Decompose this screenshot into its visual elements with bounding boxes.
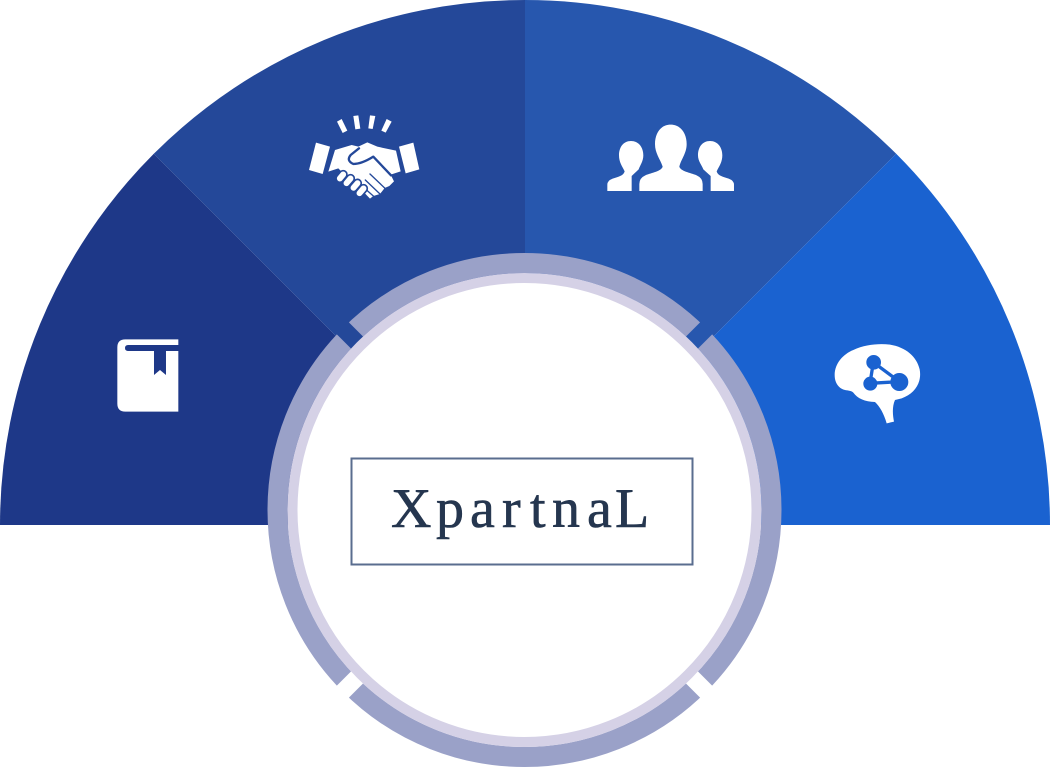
icon: handshake xyxy=(309,115,419,199)
logo box xyxy=(352,458,692,564)
sector: upper right xyxy=(525,0,896,525)
cuffs xyxy=(309,143,419,174)
rays xyxy=(337,115,392,133)
clasped hands xyxy=(328,142,401,199)
sector: far left xyxy=(0,154,525,525)
panel: four semicircle sectors xyxy=(0,0,1050,525)
left person xyxy=(607,141,643,191)
panel: central ring xyxy=(278,263,772,757)
icon: group of people xyxy=(607,125,734,191)
inner ring with white centre xyxy=(292,278,756,742)
logo frame xyxy=(352,458,692,564)
outer ring segments xyxy=(278,263,772,757)
sector: far right xyxy=(525,154,1050,525)
logo text: XpartnaL xyxy=(391,478,649,540)
centre person xyxy=(639,125,703,191)
right person xyxy=(698,141,734,191)
icon: brain with network xyxy=(835,344,920,423)
icon: book xyxy=(117,339,178,412)
sector: upper left xyxy=(154,0,525,525)
